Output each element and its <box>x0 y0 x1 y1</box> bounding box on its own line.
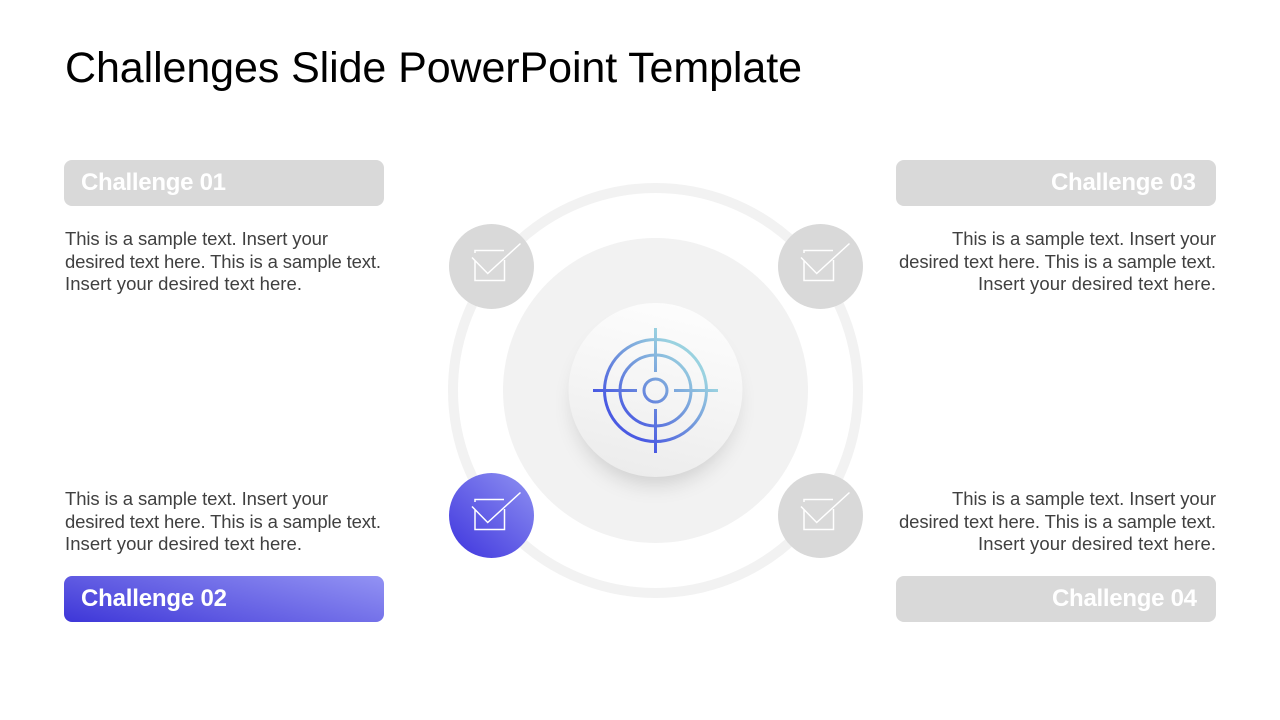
heading bar: challenge 03: Challenge 03 <box>1051 169 1196 196</box>
heading bar: challenge 01: Challenge 01 <box>81 169 226 196</box>
text block: challenge 04: Insert your desired text here. <box>978 533 1216 554</box>
heading bar: challenge 03 <box>896 160 1216 206</box>
text block: challenge 03: Insert your desired text here. <box>978 273 1216 294</box>
text block: challenge 04 <box>899 488 1216 554</box>
text block: challenge 03 <box>899 228 1216 294</box>
text block: challenge 02 <box>65 488 381 554</box>
icon: check badge bottom left active <box>449 473 534 558</box>
outer ring <box>453 188 858 593</box>
panel: challenge 04 <box>896 488 1216 622</box>
text block: challenge 01 <box>65 228 381 294</box>
text block: challenge 02: This is a sample text. Insert your <box>65 488 328 509</box>
heading bar: challenge 02: Challenge 02 <box>81 585 227 612</box>
central diagram <box>453 188 858 593</box>
heading bar: challenge 04: Challenge 04 <box>1052 585 1198 612</box>
text block: challenge 04: desired text here. This is a sample text. <box>899 511 1216 532</box>
heading bar: challenge 01 <box>64 160 384 206</box>
text block: challenge 02: desired text here. This is a sample text. <box>65 511 381 532</box>
icon: target <box>593 328 718 453</box>
text block: challenge 04: This is a sample text. Insert your <box>952 488 1216 509</box>
text block: challenge 03: desired text here. This is a sample text. <box>899 251 1216 272</box>
icon: check badge top right <box>778 224 863 309</box>
heading bar: challenge 04 <box>896 576 1216 622</box>
text block: challenge 01: This is a sample text. Insert your <box>65 228 328 249</box>
heading bar: challenge 02 <box>64 576 384 622</box>
text block: challenge 01: Insert your desired text here. <box>65 273 302 294</box>
panel: challenge 01 <box>64 160 384 294</box>
title: Challenges Slide PowerPoint Template <box>65 44 802 92</box>
text block: challenge 02: Insert your desired text here. <box>65 533 302 554</box>
centre ball <box>568 303 742 477</box>
icon: check badge bottom right <box>778 473 863 558</box>
panel: challenge 02 <box>64 488 384 622</box>
text block: challenge 03: This is a sample text. Insert your <box>952 228 1216 249</box>
inner disc <box>503 238 808 543</box>
text block: challenge 01: desired text here. This is a sample text. <box>65 251 381 272</box>
ball shadow <box>573 322 737 486</box>
panel: challenge 03 <box>896 160 1216 294</box>
icon: check badge top left <box>449 224 534 309</box>
